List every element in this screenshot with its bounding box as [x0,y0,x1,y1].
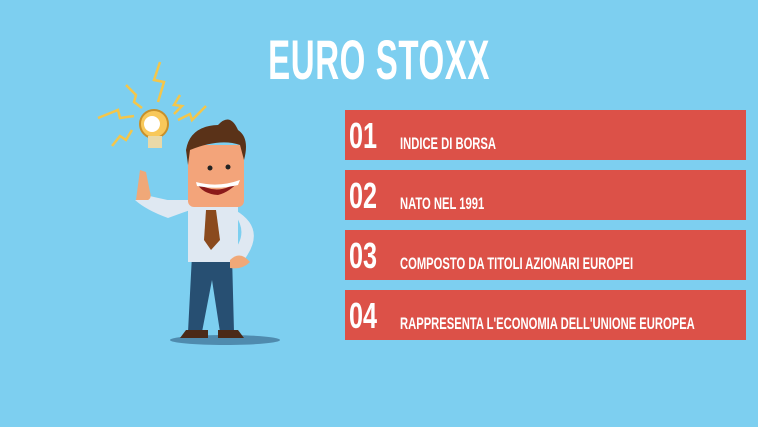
item 03: COMPOSTO DA TITOLI AZIONARI EUROPEI [400,254,633,273]
title: EURO STOXX [268,28,490,91]
item 01 [345,110,746,160]
item 01: 01 [349,115,377,156]
item 01: INDICE DI BORSA [400,134,496,153]
item 03 [345,230,746,280]
illustration: man with lightbulb [98,62,280,345]
item 04: RAPPRESENTA L'ECONOMIA DELL'UNIONE EUROPEA [400,314,695,333]
item 02: NATO NEL 1991 [400,194,484,213]
item 03: 03 [349,235,377,276]
item 02 [345,170,746,220]
item 02: 02 [349,175,377,216]
item 04 [345,290,746,340]
item 04: 04 [349,295,377,336]
